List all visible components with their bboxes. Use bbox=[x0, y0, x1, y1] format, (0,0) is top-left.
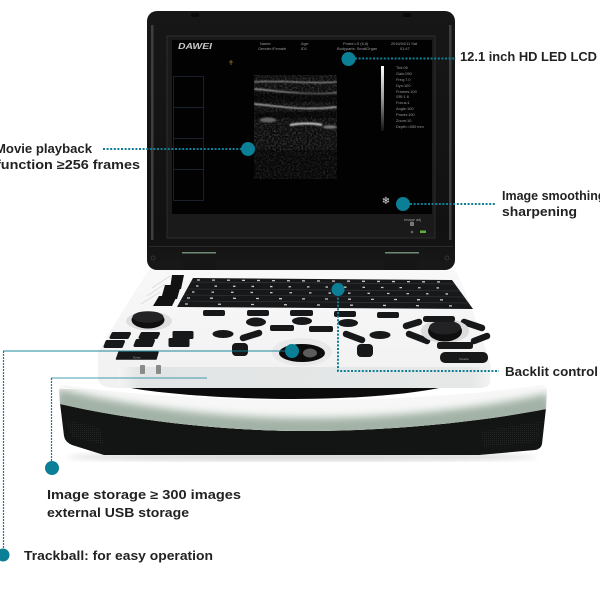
callout: backlit control: Backlit control bbox=[505, 365, 598, 379]
logo: DAWEI: DAWEI bbox=[178, 41, 213, 51]
latch switches bbox=[140, 365, 161, 374]
parameter list: Power:100 bbox=[396, 112, 415, 117]
parameter list: Gain:050 bbox=[396, 71, 413, 76]
callout: trackball bbox=[0, 344, 299, 563]
parameter list: Frames:100 bbox=[396, 89, 418, 94]
callout: trackball: Trackball: for easy operation bbox=[24, 549, 213, 563]
screen bbox=[172, 40, 432, 214]
hinges bbox=[181, 252, 419, 272]
patient info: Gender:/Female bbox=[258, 46, 286, 51]
callout: movie playback bbox=[0, 142, 255, 172]
patient info: 2016/04/11 Sat bbox=[391, 41, 418, 46]
left knob bbox=[126, 311, 172, 330]
patient info bbox=[258, 41, 418, 51]
callout: image smoothing: sharpening bbox=[502, 205, 577, 219]
patient info: Name: bbox=[260, 41, 271, 46]
patient info: Age: bbox=[301, 41, 309, 46]
parameter list: Dyn:100 bbox=[396, 83, 411, 88]
thumbnail boxes bbox=[174, 76, 204, 200]
right knob bbox=[421, 319, 469, 343]
left slider controls bbox=[141, 275, 184, 306]
parameter list: Focus:1 bbox=[396, 100, 410, 105]
callout: 12.1 inch display: 12.1 inch HD LED LCD bbox=[460, 50, 597, 64]
device base: front shell bbox=[55, 380, 551, 461]
parameter list: Freq:7.0 bbox=[396, 77, 411, 82]
parameter list: Tint:06 bbox=[396, 65, 408, 70]
key label: Enter: Enter bbox=[133, 356, 141, 360]
slanted keys bbox=[243, 322, 487, 341]
callout: image storage bbox=[45, 378, 241, 520]
top row keys bbox=[203, 310, 399, 357]
callout: image storage: Image storage ≥ 300 images bbox=[47, 488, 241, 502]
screen footer controls bbox=[404, 217, 426, 233]
parameter list: SRI:1 6 bbox=[396, 94, 409, 99]
parameter list: Depth:=050 mm bbox=[396, 124, 424, 129]
laptop lid bbox=[147, 11, 455, 270]
callout: backlit control bbox=[332, 283, 598, 379]
callout: 12.1 inch display bbox=[342, 50, 597, 66]
icon: freeze snowflake: ❄ bbox=[382, 196, 390, 207]
left key group bbox=[105, 332, 192, 359]
callout: image storage: external USB storage bbox=[47, 506, 189, 520]
screen footer controls: Image adj bbox=[404, 217, 421, 222]
callout: image smoothing bbox=[396, 189, 600, 219]
parameter list: Angle:100 bbox=[396, 106, 414, 111]
key label: Freeze: Freeze bbox=[459, 357, 469, 361]
patient info: ID1 bbox=[301, 46, 307, 51]
trackball bbox=[272, 338, 332, 366]
ultrasound image bbox=[254, 75, 337, 179]
device base: deck bbox=[98, 270, 491, 388]
cursor mark bbox=[229, 60, 233, 65]
keyboard bbox=[177, 278, 473, 309]
parameter list: Zoom:10 bbox=[396, 118, 412, 123]
patient info: 01:47 bbox=[400, 46, 410, 51]
parameter list bbox=[396, 65, 424, 129]
gray scale bar bbox=[381, 66, 384, 131]
right key group bbox=[423, 316, 488, 363]
patient info: Probe:LS (6,8) bbox=[343, 41, 369, 46]
recess under deck bbox=[131, 388, 439, 399]
patient info: Bodyparts: SmallOrgan bbox=[337, 46, 377, 51]
